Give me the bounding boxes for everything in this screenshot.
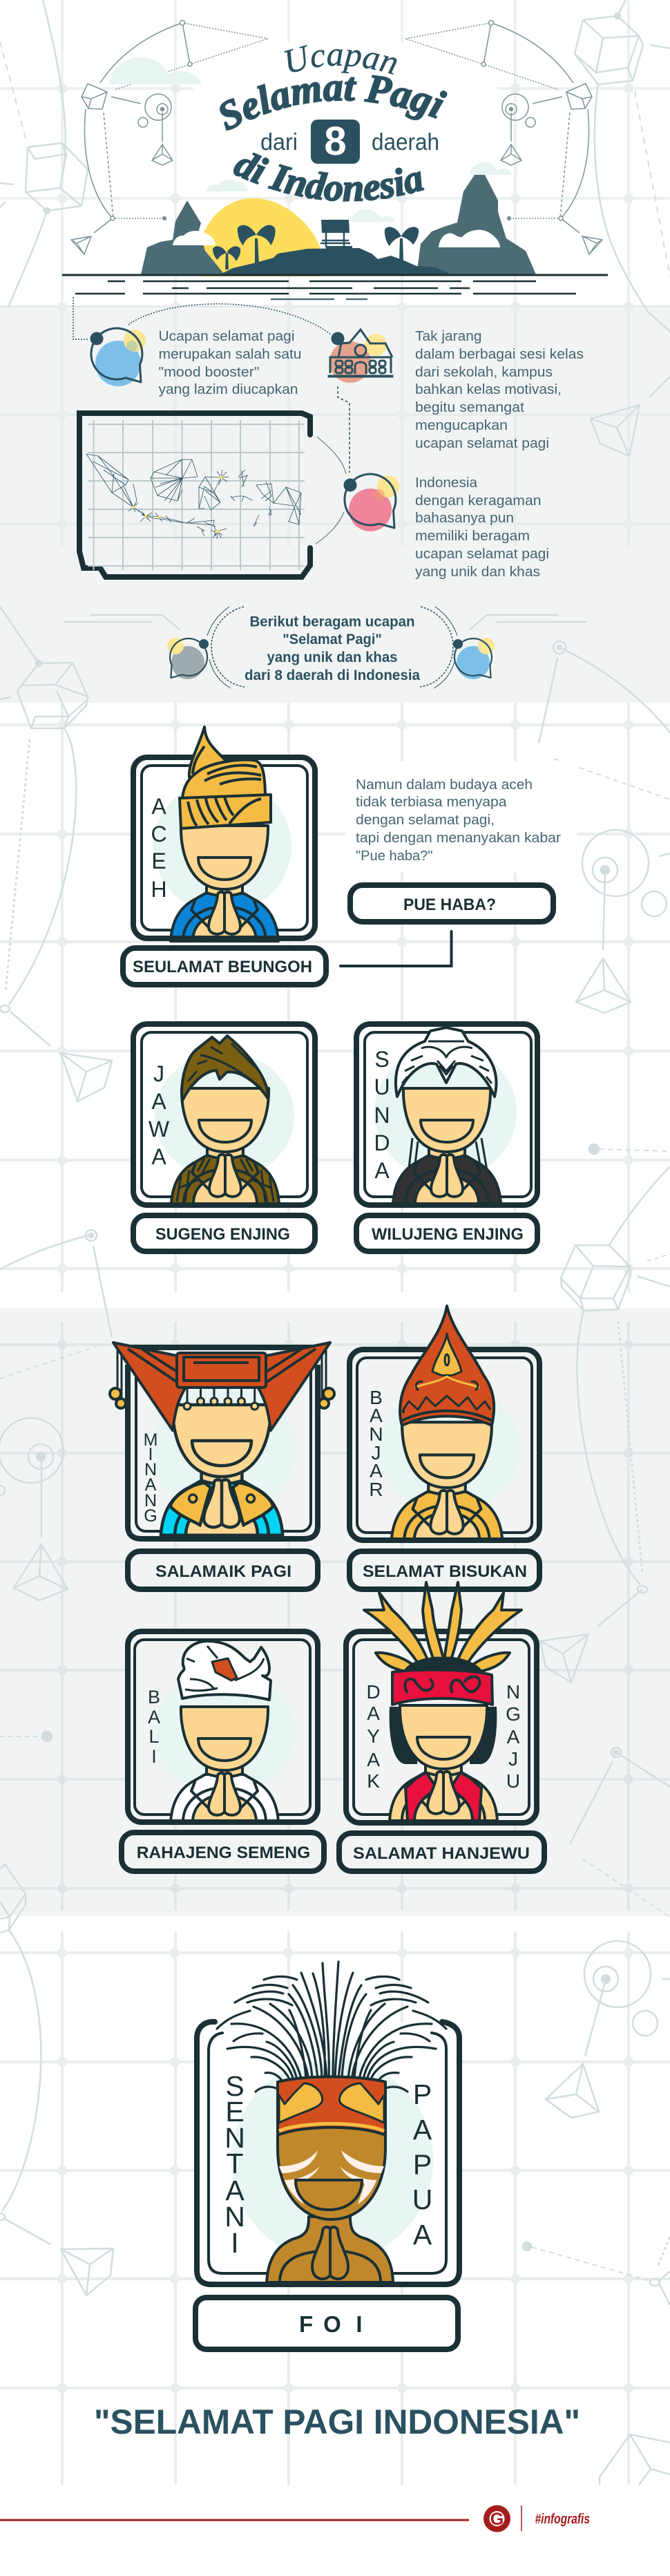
region name: B	[370, 1387, 383, 1408]
header illustration decorations: left	[71, 21, 268, 254]
intro text three: yang unik dan khas	[415, 565, 540, 580]
bubble: blue	[453, 638, 495, 679]
callout text: yang unik dan khas	[267, 650, 398, 665]
Aceh explanatory text: Namun dalam budaya aceh	[356, 777, 533, 793]
closing intro callout	[64, 607, 586, 688]
clouds: mint behind title	[109, 57, 513, 222]
label: Salamat Hanjewu	[339, 1833, 544, 1871]
Aceh headdress	[180, 727, 271, 828]
region name: Sentani: E	[225, 2096, 245, 2128]
region name: A	[370, 1405, 383, 1426]
feather headdress	[217, 1962, 446, 2092]
region name	[369, 1387, 383, 1500]
region name: Sentani: I	[231, 2227, 239, 2259]
intro text one: Ucapan selamat pagi	[159, 329, 294, 344]
closing headline: "SELAMAT PAGI INDONESIA"	[94, 2403, 580, 2441]
region name: Dayak: Y	[367, 1725, 380, 1747]
card: Bali	[128, 1631, 318, 1822]
footer	[0, 2506, 590, 2532]
region name: A	[151, 794, 166, 819]
label: Foi	[195, 2298, 458, 2349]
region name: C	[151, 822, 167, 846]
region name: I	[151, 1746, 157, 1767]
region name: M	[144, 1430, 157, 1450]
character: Papua	[267, 2077, 394, 2284]
region name: Sentani: S	[225, 2070, 245, 2102]
region name	[148, 1687, 160, 1767]
region name: Sentani: N	[224, 2122, 245, 2154]
region name: D	[374, 1130, 390, 1155]
lower-left cube and links	[0, 607, 88, 728]
region name: I	[149, 1445, 153, 1464]
region name: N	[144, 1491, 157, 1510]
intro text two: ucapan selamat pagi	[415, 436, 549, 451]
Minang headdress	[110, 1343, 334, 1430]
region name: A	[374, 1158, 390, 1183]
map frame	[79, 413, 310, 577]
card: Aceh	[133, 727, 315, 941]
region name: A	[151, 1144, 166, 1169]
Dayak headdress	[364, 1582, 521, 1705]
region name: Sentani	[224, 2070, 245, 2259]
region name: A	[151, 1089, 166, 1114]
hair	[390, 1707, 497, 1764]
character: Banjar	[392, 1422, 502, 1541]
region name: N	[144, 1460, 157, 1479]
Aceh explanatory text	[356, 777, 561, 864]
region name: Ngaju: G	[506, 1703, 521, 1725]
map panel	[79, 413, 310, 577]
grey band one	[0, 309, 670, 703]
white patch behind title	[193, 43, 497, 188]
intro text one	[159, 329, 301, 397]
label: Sugeng Enjing	[133, 1215, 315, 1251]
title line: Selamat Pagi: Selamat Pagi	[220, 75, 448, 131]
Banjar headdress	[400, 1306, 494, 1426]
right mountain	[417, 175, 536, 274]
connector lines in intro	[73, 297, 350, 544]
hashtag: #infografis	[535, 2512, 590, 2527]
intro text one: yang lazim diucapkan	[159, 382, 298, 397]
region name	[151, 794, 167, 902]
water lines	[75, 281, 576, 299]
region name: Sentani: N	[224, 2201, 245, 2233]
logo: G	[490, 2510, 504, 2529]
logo	[484, 2506, 510, 2532]
character: Sunda	[393, 1088, 501, 1204]
card: Sunda	[356, 1024, 537, 1205]
intro bubble: blue	[90, 328, 146, 386]
region name: Sentani: A	[225, 2175, 245, 2206]
label: Rahajeng Semeng: RAHAJENG SEMENG	[137, 1844, 310, 1862]
intro text two: dalam berbagai sesi kelas	[415, 347, 584, 362]
title line: dari: dari	[260, 129, 298, 155]
icon: school building	[329, 330, 392, 383]
footer rule	[0, 2519, 469, 2521]
ground line	[62, 274, 608, 276]
Aceh explanatory text: dengan selamat pagi,	[356, 813, 495, 828]
blangkon headdress	[182, 1036, 268, 1101]
intro text two: bahkan kelas motivasi,	[415, 382, 562, 397]
label: Salamaik Pagi: SALAMAIK PAGI	[155, 1562, 291, 1581]
card: Banjar	[350, 1306, 539, 1541]
label: Selamat Bisukan: SELAMAT BISUKAN	[363, 1562, 527, 1581]
region name	[149, 1061, 170, 1169]
card: Dayak Ngaju	[346, 1582, 537, 1823]
header illustration decorations: right	[405, 21, 602, 254]
card frame	[197, 2022, 459, 2284]
sun	[199, 198, 320, 276]
label: Selamat Bisukan	[350, 1551, 539, 1589]
intro text three: bahasanya pun	[415, 511, 514, 526]
region name: U	[374, 1074, 390, 1099]
label: Salamat Hanjewu: SALAMAT HANJEWU	[353, 1844, 530, 1863]
intro text two: dari sekolah, kampus	[415, 365, 553, 380]
region name: E	[151, 849, 166, 873]
region name: Ngaju: J	[508, 1748, 518, 1770]
title	[220, 45, 448, 202]
grid nodes	[57, 84, 633, 2393]
region name: Papua	[412, 2078, 432, 2251]
intro text three: ucapan selamat pagi	[415, 547, 549, 562]
intro text three: memiliki beragam	[415, 529, 530, 544]
callout text: dari 8 daerah di Indonesia	[245, 667, 420, 683]
callout text: "Selamat Pagi"	[283, 632, 382, 647]
Sunda headdress	[396, 1027, 496, 1097]
bubble: grey	[167, 638, 209, 679]
region name: Dayak: K	[367, 1770, 380, 1792]
intro text three	[415, 475, 549, 580]
region name: R	[369, 1479, 383, 1500]
white patch behind Aceh text	[345, 761, 577, 873]
label: Pue Haba: PUE HABA?	[403, 896, 496, 914]
connector: greeting to question	[341, 931, 452, 966]
map grid	[88, 420, 305, 570]
card: Papua Sentani	[197, 1962, 459, 2284]
Bali headdress	[178, 1641, 271, 1700]
label: Wilujeng Enjing	[356, 1215, 537, 1251]
region name: S	[374, 1047, 390, 1072]
character: Minang	[161, 1405, 283, 1535]
card: Jawa	[133, 1024, 315, 1205]
title line: Ucapan: Ucapan	[284, 45, 396, 75]
title number 8: 8	[324, 119, 347, 164]
region name: Dayak: A	[367, 1703, 380, 1724]
label: Rahajeng Semeng	[122, 1832, 324, 1871]
region name: Ngaju: U	[506, 1770, 520, 1792]
title line: di Indonesia: di Indonesia	[233, 152, 424, 202]
map highlight dots	[132, 475, 222, 533]
callout side lines	[64, 615, 586, 629]
label: Foi: O	[323, 2311, 341, 2337]
region name: A	[148, 1707, 160, 1727]
callout text	[245, 614, 420, 683]
label: Wilujeng Enjing: WILUJENG ENJING	[372, 1225, 524, 1244]
intro text one: "mood booster"	[159, 365, 260, 380]
label: Seulamat Beungoh: SEULAMAT BEUNGOH	[133, 958, 312, 976]
grey band two	[0, 1308, 670, 1916]
palm trees	[213, 225, 419, 269]
title badge: 8	[311, 120, 360, 164]
title line: daerah: daerah	[372, 129, 439, 155]
region name: J	[153, 1061, 164, 1086]
hut	[320, 220, 352, 249]
region name: J	[372, 1442, 381, 1464]
intro text one: merupakan salah satu	[159, 347, 301, 362]
region name	[374, 1047, 390, 1183]
region name: Papua: P	[413, 2078, 432, 2110]
callout brackets	[207, 607, 457, 688]
label: Foi: F	[299, 2311, 313, 2337]
Aceh explanatory text: tidak terbiasa menyapa	[356, 795, 507, 810]
label: Seulamat Beungoh	[123, 948, 326, 985]
region name	[144, 1430, 157, 1526]
white cloud left	[173, 231, 216, 245]
Aceh explanatory text: "Pue haba?"	[356, 849, 432, 864]
label: Pue Haba	[350, 885, 553, 922]
region name: Dayak: A	[367, 1749, 380, 1770]
region name: Dayak	[366, 1681, 381, 1792]
intro text three: dengan keragaman	[415, 493, 542, 509]
region name: Papua: A	[413, 2219, 432, 2251]
landscape illustration	[62, 175, 608, 299]
Aceh explanatory text: tapi dengan menanyakan kabar	[356, 831, 561, 846]
region name: A	[370, 1460, 383, 1481]
region name: N	[374, 1103, 390, 1128]
intro text two: Tak jarang	[415, 329, 482, 344]
region name: Papua: A	[413, 2114, 432, 2146]
region name: Papua: U	[412, 2184, 432, 2215]
left mountain	[141, 200, 224, 274]
white cloud right	[439, 230, 500, 247]
region name: H	[151, 877, 167, 902]
region name: B	[148, 1687, 160, 1707]
region name: Sentani: T	[226, 2148, 244, 2179]
island	[220, 248, 451, 274]
Indonesia network map	[86, 454, 301, 539]
callout text: Berikut beragam ucapan	[250, 614, 414, 630]
label: Sugeng Enjing: SUGENG ENJING	[155, 1225, 290, 1244]
character: Bali	[171, 1707, 278, 1822]
region name: G	[144, 1506, 157, 1526]
intro bubble: pink	[344, 474, 399, 531]
label: Salamaik Pagi	[128, 1551, 318, 1589]
intro text three: Indonesia	[415, 475, 478, 491]
left side lower: dashes, cube, arc, triangle	[42, 1732, 52, 1741]
region name: Dayak: D	[366, 1681, 381, 1703]
character: Jawa	[171, 1088, 279, 1204]
region name: W	[149, 1117, 170, 1142]
intro text two: mengucapkan	[415, 418, 508, 433]
region name: Papua: P	[413, 2149, 432, 2181]
region name: N	[369, 1423, 383, 1445]
label: Foi: I	[356, 2311, 363, 2337]
character: Dayak	[390, 1705, 497, 1821]
card: Minang	[110, 1343, 334, 1539]
region name: L	[149, 1726, 160, 1747]
right side: circles, cube, arc	[539, 647, 670, 743]
region name: Ngaju: N	[506, 1681, 520, 1703]
intro text two: begitu semangat	[415, 400, 524, 415]
region name: Ngaju: A	[507, 1726, 520, 1748]
region name: A	[145, 1475, 157, 1495]
character: Aceh	[171, 826, 278, 941]
region name: Ngaju	[506, 1681, 521, 1792]
intro text two	[415, 329, 584, 451]
